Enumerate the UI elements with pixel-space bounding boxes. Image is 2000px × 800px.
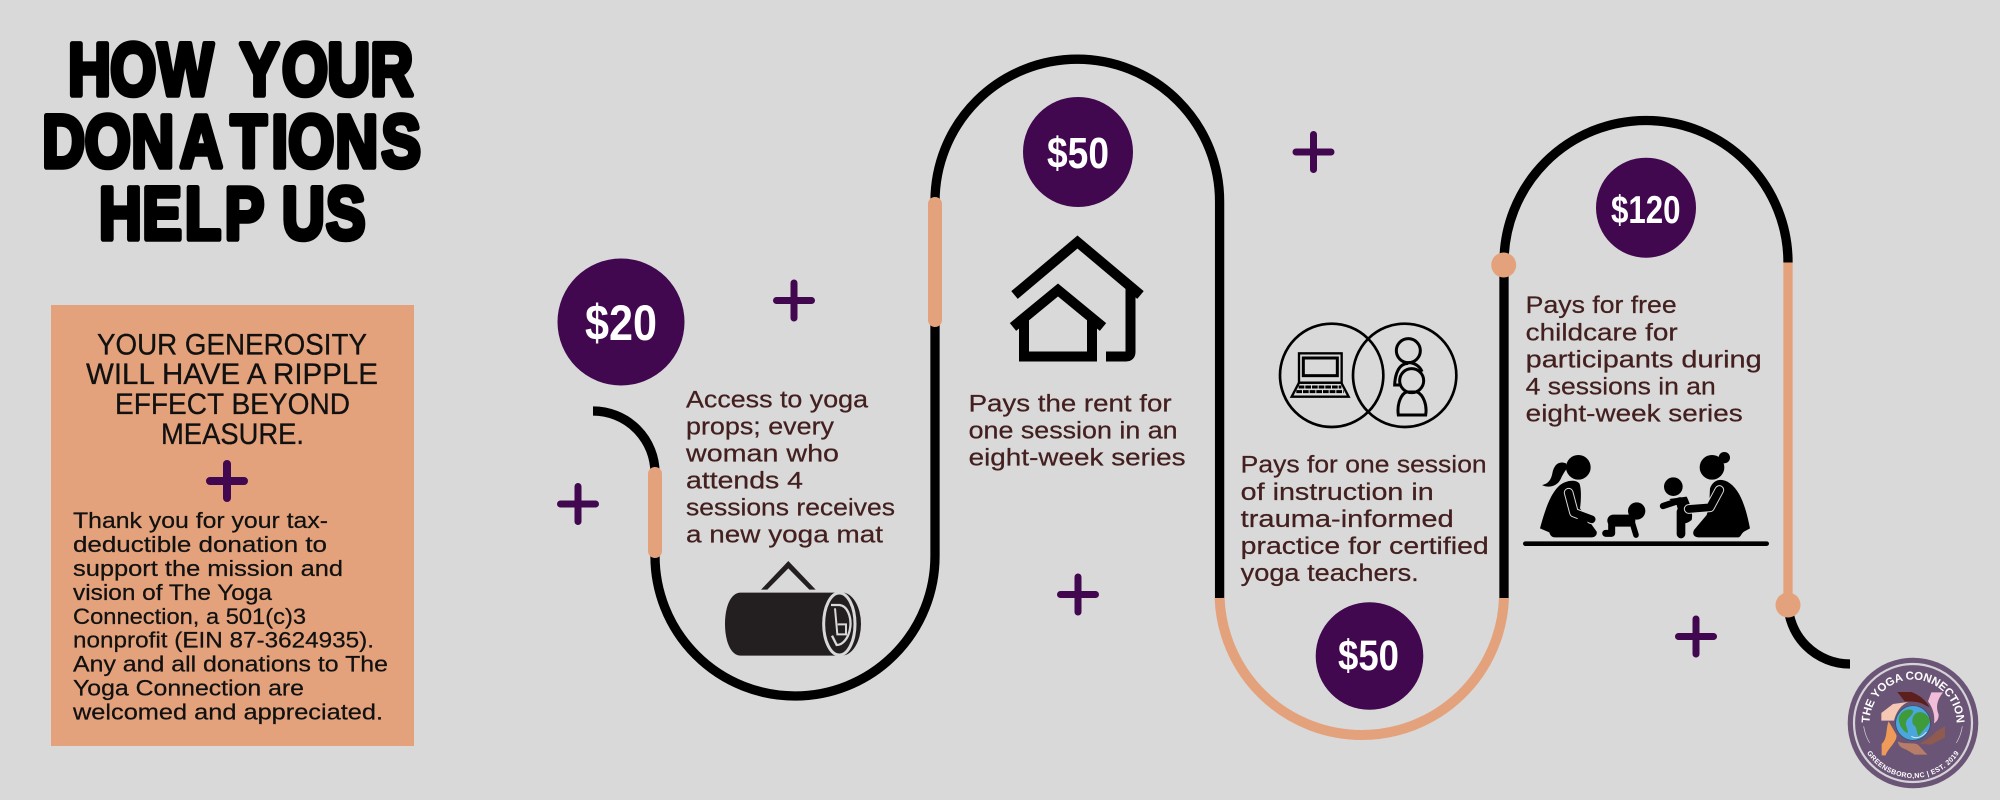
- text block: thank you note: Connection, a 501(c)3: [73, 604, 306, 629]
- text block: thank you note: Thank you for your tax-: [73, 508, 328, 533]
- text block: instruction: [1241, 452, 1489, 587]
- path accent: dot right: [1776, 592, 1800, 618]
- logo lettering: [1862, 672, 1965, 780]
- text block: rent: Pays the rent for: [969, 391, 1172, 418]
- text block: thank you note: nonprofit (EIN 87-3624935).: [73, 628, 374, 652]
- text block: yoga props: props; every: [686, 414, 835, 441]
- text block: thank you note: [72, 508, 388, 724]
- text block: yoga props: [685, 387, 895, 549]
- decorative plus signs: [560, 134, 1714, 654]
- text block: thank you note: Yoga Connection are: [73, 676, 304, 700]
- title: HELP US: [99, 173, 365, 256]
- icon: caregivers and children: [1525, 452, 1767, 544]
- text block: childcare: childcare for: [1526, 320, 1678, 347]
- text block: yoga props: Access to yoga: [686, 387, 868, 414]
- logo hands and globe: [1864, 692, 1962, 755]
- text block: childcare: 4 sessions in an: [1526, 374, 1716, 401]
- text block: instruction: trauma-informed: [1241, 506, 1454, 533]
- text block: yoga props: a new yoga mat: [686, 522, 883, 549]
- badge: $20: $20: [585, 295, 657, 351]
- text block: rent: one session in an: [969, 418, 1178, 445]
- text block: childcare: eight-week series: [1526, 401, 1743, 428]
- logo: The Yoga Connection: [1848, 658, 1978, 788]
- text block: thank you note: Any and all donations to The: [73, 652, 388, 676]
- badge: $120: $120: [1611, 189, 1680, 232]
- title: [42, 29, 421, 256]
- heading: generosity: WILL HAVE A RIPPLE: [86, 358, 378, 391]
- panel: generosity message: [51, 305, 414, 746]
- logo lettering: THE YOGA CONNECTION: [1862, 672, 1965, 722]
- text block: thank you note: support the mission and: [73, 556, 343, 581]
- text block: rent: eight-week series: [969, 445, 1186, 472]
- path accent: dot left: [1491, 252, 1516, 278]
- badge: $50 rent: $50: [1047, 129, 1109, 178]
- icon: plus: [210, 464, 244, 498]
- badge: $50 instruction: [1316, 602, 1423, 710]
- badge: $50 instruction: $50: [1338, 632, 1399, 680]
- text block: childcare: [1526, 292, 1762, 428]
- heading: generosity: EFFECT BEYOND: [115, 388, 350, 421]
- text block: thank you note: vision of The Yoga: [73, 580, 273, 605]
- text block: childcare: participants during: [1526, 347, 1762, 374]
- badge: $120: [1596, 158, 1696, 258]
- heading: generosity: MEASURE.: [161, 418, 304, 451]
- text block: instruction: of instruction in: [1241, 479, 1434, 506]
- text block: thank you note: welcomed and appreciated.: [72, 700, 383, 724]
- logo lettering: GREENSBORO,NC | EST. 2019: [1868, 751, 1958, 780]
- path accent: second bar: [928, 204, 942, 320]
- icon: rolled yoga mat: [725, 561, 861, 656]
- text block: yoga props: sessions receives: [686, 495, 895, 522]
- badge: $50 rent: [1023, 97, 1133, 207]
- text block: instruction: practice for certified: [1241, 533, 1489, 560]
- title: HOW YOUR: [68, 29, 413, 112]
- path accent: first bar: [648, 474, 662, 551]
- icon: laptop and people venn: [1280, 324, 1456, 427]
- title: DONATIONS: [42, 101, 421, 184]
- heading: generosity: YOUR GENEROSITY: [97, 328, 367, 362]
- text block: yoga props: woman who: [685, 441, 839, 468]
- text block: instruction: yoga teachers.: [1241, 560, 1419, 587]
- badge: $20: [558, 258, 684, 386]
- text block: rent: [969, 391, 1186, 472]
- text block: yoga props: attends 4: [686, 468, 803, 495]
- text block: instruction: Pays for one session: [1241, 452, 1487, 479]
- heading: generosity: [86, 328, 378, 451]
- winding path line: [593, 59, 1850, 735]
- text block: childcare: Pays for free: [1526, 292, 1677, 319]
- text block: thank you note: deductible donation to: [73, 532, 327, 557]
- icon: houses: [1013, 242, 1140, 356]
